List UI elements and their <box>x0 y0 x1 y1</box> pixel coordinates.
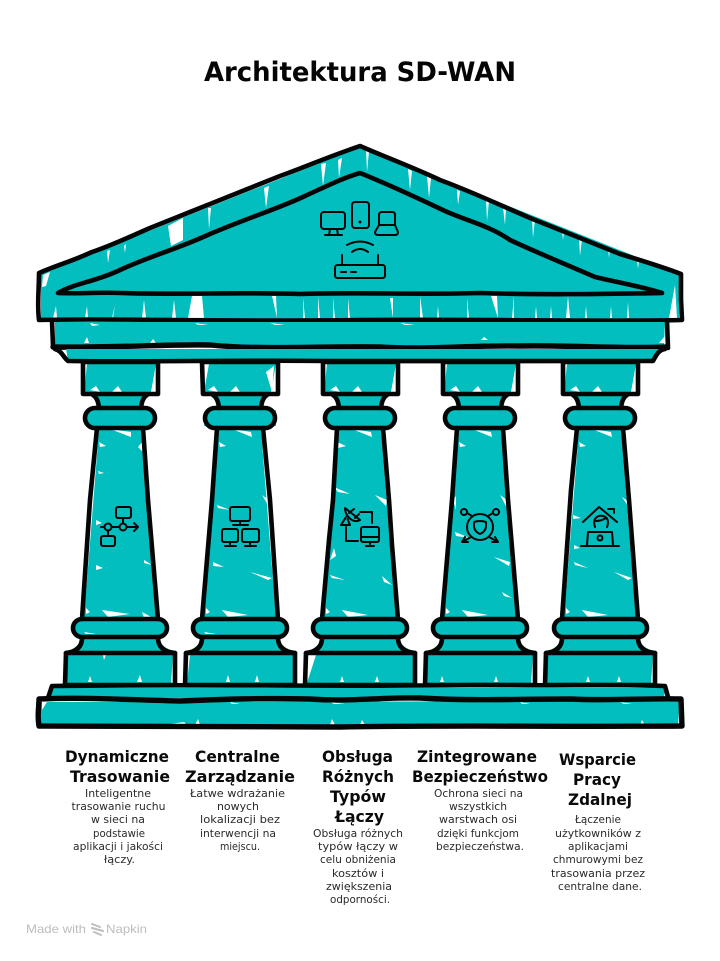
heading: Centralne <box>195 747 280 766</box>
icon: networked monitors <box>222 507 259 546</box>
column 4: integrated security <box>425 362 535 685</box>
heading: Różnych <box>322 767 394 786</box>
foundation fill <box>36 701 680 725</box>
temple base <box>36 685 682 727</box>
icon: shield with network arrows <box>461 509 499 542</box>
pediment fill <box>41 147 680 319</box>
title: Architektura SD-WAN <box>204 57 516 88</box>
icon: tablet <box>352 202 369 228</box>
heading: Zdalnej <box>568 790 632 809</box>
foundation outline <box>48 685 668 698</box>
description: trasowania przez <box>551 868 646 880</box>
description: interwencji na <box>200 828 276 840</box>
column 5: remote work <box>545 362 655 685</box>
description: bezpieczeństwa. <box>436 841 524 853</box>
heading: Zintegrowane <box>417 747 537 766</box>
description: centralne dane. <box>558 881 642 893</box>
description: typów łączy w <box>318 841 398 853</box>
watermark: Made with Napkin: Napkin <box>106 922 147 936</box>
description <box>189 788 285 853</box>
heading: Pracy <box>573 770 622 789</box>
text block: central management <box>185 747 295 853</box>
pediment scribble gaps <box>42 150 677 318</box>
icon: desktop monitor <box>321 212 345 235</box>
description: chmurowymi bez <box>553 854 643 866</box>
heading: Dynamiczne <box>65 747 169 766</box>
description: Inteligentne <box>85 788 151 800</box>
description: warstwach osi <box>439 814 517 826</box>
description <box>313 828 403 906</box>
text block: remote work <box>551 750 646 893</box>
column 1: dynamic routing <box>65 362 175 685</box>
text block: multiple link types <box>313 747 403 906</box>
description: zwiększenia <box>326 881 392 893</box>
description: aplikacji i jakości <box>73 841 163 853</box>
heading: Typów <box>330 787 386 806</box>
icon: home office laptop <box>581 507 619 546</box>
description: celu obniżenia <box>320 854 396 866</box>
heading: Trasowanie <box>70 767 170 786</box>
description <box>434 788 524 853</box>
heading: Bezpieczeństwo <box>412 767 548 786</box>
heading: Zarządzanie <box>185 767 295 786</box>
description: w sieci na <box>91 814 145 826</box>
heading: Wsparcie <box>559 750 636 769</box>
second entablature band <box>55 322 665 346</box>
description: wszystkich <box>449 801 507 813</box>
description: użytkowników z <box>555 828 642 840</box>
description: trasowanie ruchu <box>72 801 166 813</box>
description <box>72 788 166 866</box>
description: Łatwe wdrażanie <box>189 788 285 800</box>
icon: wifi router <box>335 242 385 278</box>
inner triangle <box>60 175 660 293</box>
heading <box>559 750 636 809</box>
column 2: central management <box>185 362 295 685</box>
column 3: multiple link types <box>305 362 415 685</box>
icon: routing diagram <box>101 507 138 546</box>
description: aplikacjami <box>568 841 628 853</box>
description: Ochrona sieci na <box>434 788 523 800</box>
description: Obsługa różnych <box>313 828 403 840</box>
temple roof <box>38 146 682 361</box>
heading <box>322 747 394 826</box>
description: nowych <box>217 801 259 813</box>
heading: Obsługa <box>322 747 393 766</box>
text block: integrated security <box>412 747 548 853</box>
text block: dynamic routing <box>65 747 170 866</box>
heading: Łączy <box>334 807 385 826</box>
description: dzięki funkcjom <box>437 828 519 840</box>
description: podstawie <box>93 828 145 840</box>
watermark: Made with Napkin <box>26 922 147 936</box>
plinth step <box>50 688 665 698</box>
heading <box>65 747 170 786</box>
third entablature band <box>66 349 660 361</box>
heading <box>412 747 548 786</box>
description: kosztów i <box>332 868 384 880</box>
roof icons: devices and router <box>321 202 398 278</box>
description: łączy. <box>104 854 135 866</box>
description: lokalizacji bez <box>200 814 281 826</box>
description: Łączenie <box>574 814 621 826</box>
description: odporności. <box>330 894 390 906</box>
description: miejscu. <box>220 841 260 853</box>
description <box>551 814 646 893</box>
watermark: Made with Napkin: Made with <box>26 922 86 936</box>
icon: satellite dish and monitor <box>341 508 379 546</box>
icon: laptop <box>375 212 398 235</box>
heading <box>185 747 295 786</box>
pediment outline <box>38 146 682 321</box>
